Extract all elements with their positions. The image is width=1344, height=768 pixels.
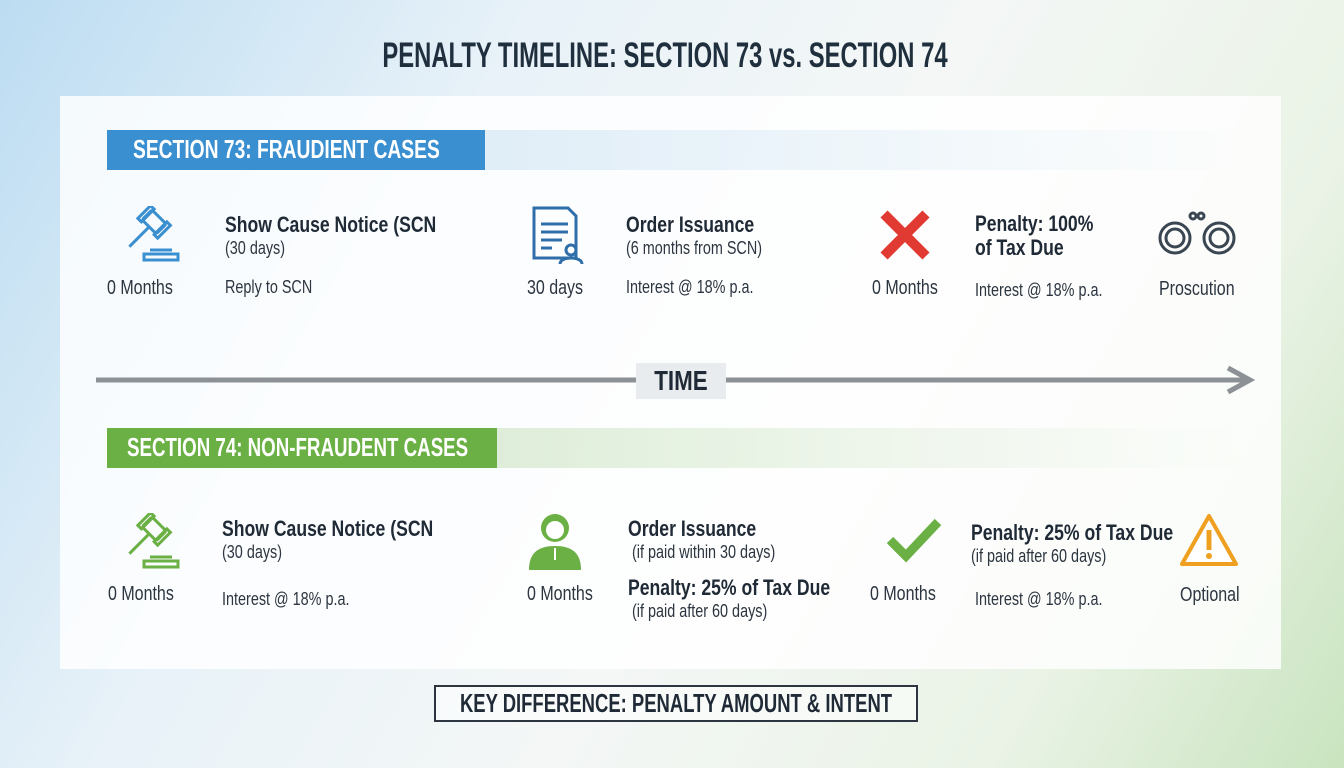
text: penalty 25: Penalty: 25% of Tax Due [971,520,1173,545]
text: 0 months: 0 Months [872,277,938,299]
text: penalty 25: Interest @ 18% p.a. [975,589,1102,609]
text: order issuance 73: Interest @ 18% p.a. [626,277,753,297]
text: order issuance 73: (6 months from SCN) [626,238,762,258]
text: show cause notice: Show Cause Notice (SCN [225,212,436,237]
section 74 header: SECTION 74: NON-FRAUDENT CASES [127,432,468,462]
arrow: time [96,366,1255,394]
text: order issuance 74 [628,516,830,621]
text: 30 days: 30 days [527,277,583,299]
label: time: TIME [654,365,708,396]
text: 0 months: 0 Months [108,583,174,605]
text: order issuance 74: (if paid within 30 days) [632,542,775,562]
text: show cause notice [225,212,436,297]
icon: document [532,206,584,264]
icon: red x [880,210,930,260]
text: order issuance 74: Penalty: 25% of Tax Due [628,575,830,600]
text: optional: Optional [1180,584,1240,606]
icon: warning [1180,514,1238,566]
text: 0 months: 0 Months [527,583,593,605]
title: PENALTY TIMELINE: SECTION 73 vs. SECTION 74 [382,36,948,75]
text: show cause notice 74: Show Cause Notice (SCN [222,516,433,541]
text: order issuance 73 [626,212,762,297]
text: penalty 25 [971,520,1173,609]
icon: gavel green [128,513,180,568]
text: show cause notice 74: (30 days) [222,542,282,562]
text: penalty 100: Interest @ 18% p.a. [975,280,1102,300]
section 74 header [107,428,1247,468]
callout: key difference: KEY DIFFERENCE: PENALTY AMOUNT & INTENT [460,688,892,718]
icon: gavel blue [128,206,180,262]
section 73 header [107,130,1247,170]
text: proscution: Proscution [1159,278,1235,300]
icon: check [886,518,942,562]
text: order issuance 74: Order Issuance [628,516,756,541]
section 73 header: SECTION 73: FRAUDIENT CASES [133,134,440,164]
text: order issuance 73: Order Issuance [626,212,754,237]
text: show cause notice: (30 days) [225,238,285,258]
text: 0 months: 0 Months [870,583,936,605]
text: penalty 100: Penalty: 100% [975,211,1093,236]
text: show cause notice: Reply to SCN [225,277,312,297]
text: show cause notice 74 [222,516,433,609]
label: time [636,363,726,399]
icon: handcuffs [1158,212,1236,254]
panel: main [60,96,1281,669]
text: 0 months: 0 Months [107,277,173,299]
text: penalty 25: (if paid after 60 days) [971,546,1106,566]
text: penalty 100: of Tax Due [975,235,1064,260]
text: penalty 100 [975,211,1102,300]
text: show cause notice 74: Interest @ 18% p.a. [222,589,349,609]
text: order issuance 74: (if paid after 60 days) [632,601,767,621]
icon: person [529,514,581,570]
